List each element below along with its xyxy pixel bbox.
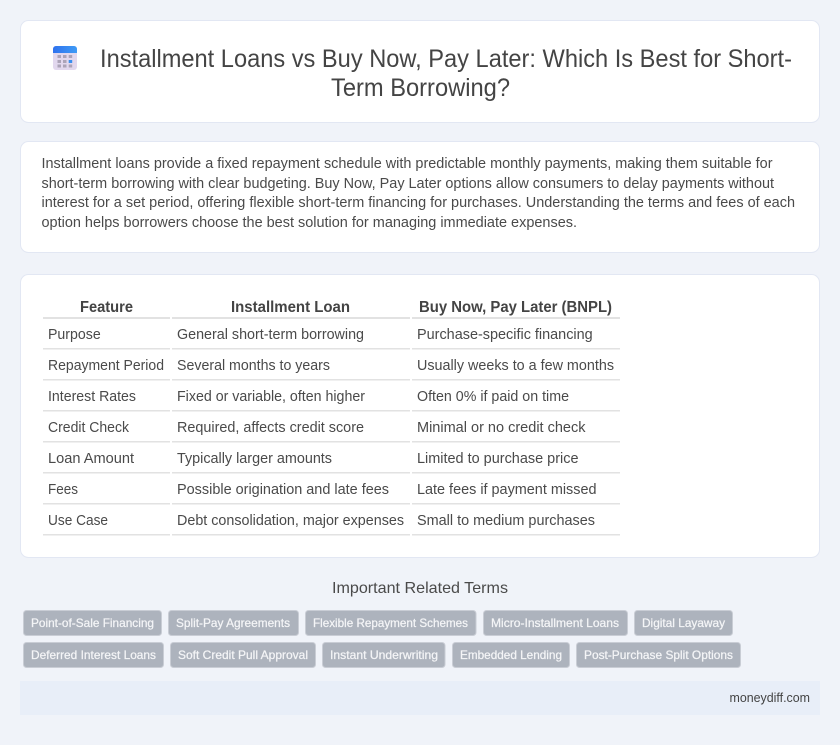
row: use case: Debt consolidation, major expenses: [177, 513, 404, 529]
row: loan amount: [48, 451, 578, 467]
row: credit check: Minimal or no credit check: [417, 420, 586, 436]
tag: [24, 642, 164, 668]
row: purpose: General short-term borrowing: [177, 327, 364, 343]
row: fees: Fees: [48, 482, 78, 498]
row: repayment period: Several months to years: [177, 358, 330, 374]
tag: [634, 610, 732, 636]
text block: summary: [42, 156, 795, 231]
row: interest rates: Fixed or variable, often higher: [177, 389, 365, 405]
tag: [168, 610, 298, 636]
tag: Soft Credit Pull Approval: [178, 648, 308, 662]
row: interest rates: Interest Rates: [48, 389, 136, 405]
heading: important related terms: Important Related Terms: [332, 580, 508, 597]
tags: related terms: [24, 610, 740, 668]
row: use case: [48, 513, 595, 529]
panel: title card: [20, 20, 820, 122]
table header: Feature: [80, 299, 133, 316]
tag: Micro-Installment Loans: [491, 616, 619, 630]
tag: [24, 610, 162, 636]
row: use case: Use Case: [48, 513, 108, 529]
row: purpose: [48, 327, 593, 343]
row: purpose: Purpose: [48, 327, 101, 343]
title: [100, 45, 792, 102]
row: loan amount: Typically larger amounts: [177, 451, 332, 467]
table header: [80, 299, 612, 316]
footer: moneydiff.com: [730, 690, 810, 705]
tag: [484, 610, 628, 636]
row: repayment period: [48, 358, 614, 374]
row: loan amount: Limited to purchase price: [417, 451, 578, 467]
tag: [322, 642, 445, 668]
tag: Point-of-Sale Financing: [31, 616, 154, 630]
footer: [20, 681, 820, 715]
row: credit check: Credit Check: [48, 420, 130, 436]
row: credit check: Required, affects credit score: [177, 420, 364, 436]
text block: summary: interest for a set period, offering flexible short-term financing for purchases. Understanding the terms and fees of each: [42, 195, 795, 211]
row: credit check: [48, 420, 586, 436]
row: fees: Possible origination and late fees: [177, 482, 389, 498]
text block: summary: Installment loans provide a fixed repayment schedule with predictable monthly payments, making them suitable for: [42, 156, 773, 172]
row: interest rates: [48, 389, 569, 405]
tag: Embedded Lending: [460, 648, 562, 662]
row: fees: [48, 482, 596, 498]
text block: summary: short-term borrowing with clear budgeting. Buy Now, Pay Later options allow consumers to delay payments without: [42, 176, 774, 192]
row: purpose: Purchase-specific financing: [417, 327, 593, 343]
tag: Instant Underwriting: [330, 648, 438, 662]
tag: [576, 642, 740, 668]
panel: summary paragraph: [20, 142, 820, 252]
row: repayment period: Usually weeks to a few months: [417, 358, 614, 374]
tag: [306, 610, 476, 636]
icon: calendar: [53, 46, 77, 70]
tag: Deferred Interest Loans: [31, 648, 156, 662]
table header: Buy Now, Pay Later (BNPL): [419, 299, 612, 316]
row: interest rates: Often 0% if paid on time: [417, 389, 569, 405]
tag: [170, 642, 316, 668]
row: repayment period: Repayment Period: [48, 358, 164, 374]
row: loan amount: Loan Amount: [48, 451, 134, 467]
tag: Split-Pay Agreements: [176, 616, 290, 630]
row: fees: Late fees if payment missed: [417, 482, 596, 498]
title: Installment Loans vs Buy Now, Pay Later: Which Is Best for Short-: [100, 45, 792, 73]
table header: Installment Loan: [231, 299, 350, 316]
text block: summary: option helps borrowers choose the best solution for managing immediate expenses.: [42, 215, 577, 231]
panel: comparison table: [20, 274, 820, 558]
title: Term Borrowing?: [331, 74, 510, 102]
tag: Digital Layaway: [642, 616, 725, 630]
tag: Flexible Repayment Schemes: [313, 616, 468, 630]
tag: Post-Purchase Split Options: [584, 648, 733, 662]
row: use case: Small to medium purchases: [417, 513, 595, 529]
tag: [452, 642, 570, 668]
